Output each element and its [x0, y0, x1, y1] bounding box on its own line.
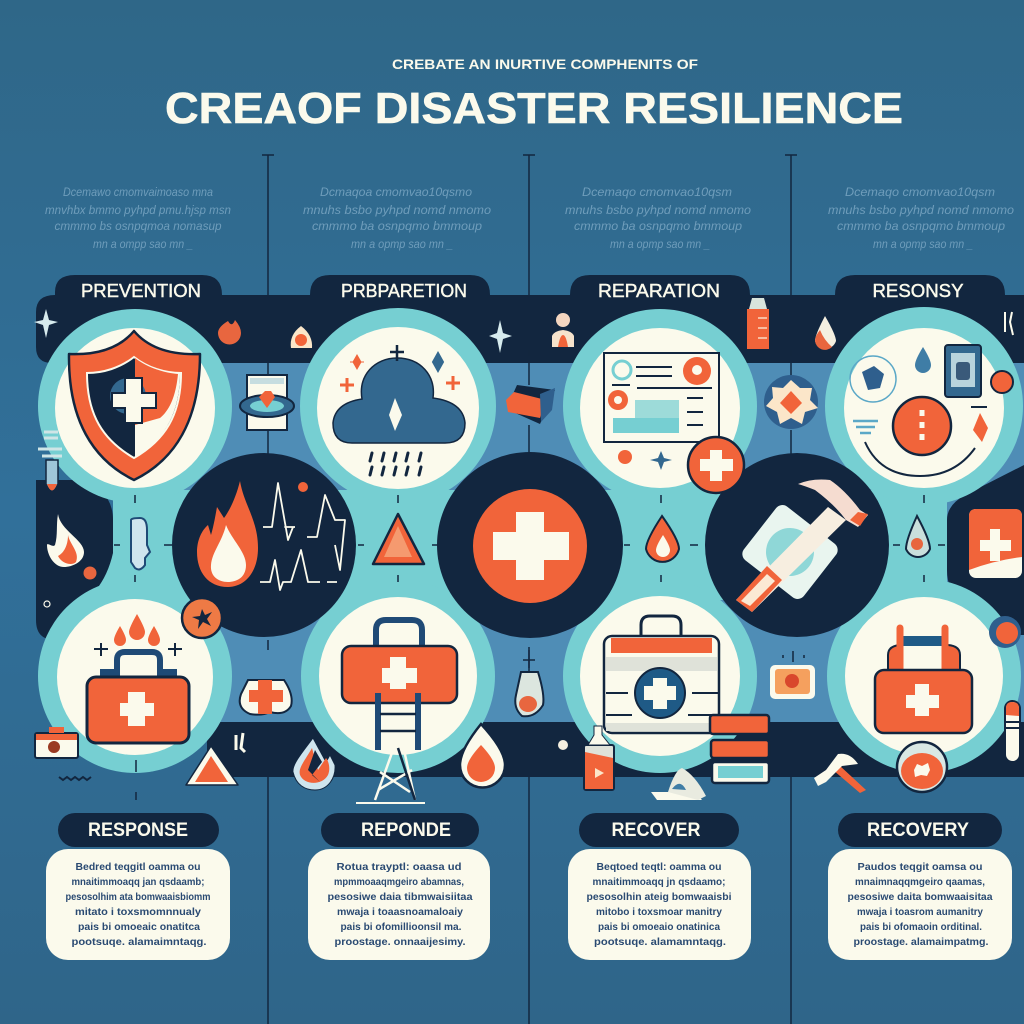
icon: stack of boxes [710, 715, 769, 783]
icon: capsule tube [1005, 701, 1020, 762]
icon: flame and heartbeat [197, 481, 345, 590]
icon: flame drop [460, 724, 505, 788]
body text: pais bi ofomillioonsil ma. [340, 921, 462, 933]
icon: sparkle [34, 309, 58, 338]
text box [828, 849, 1012, 960]
dark lower band [207, 722, 1024, 777]
body text [328, 861, 473, 948]
tab labels: RESONSY [872, 281, 964, 301]
icon: glass drop [906, 516, 930, 557]
body text: pesosolhim ata bomwaaisbiomm [66, 891, 210, 903]
faint intro text: column 4: mnuhs bsbo pyhpd nomd nmomo [828, 203, 1014, 217]
left side small icons [34, 309, 150, 758]
body text: Bedred teqgitl oamma ou [76, 861, 200, 873]
icon: first aid kit with ladder [342, 620, 457, 750]
faint intro text: column 3: Dcemaqo cmomvao10qsm [582, 185, 732, 199]
text box [46, 849, 230, 960]
faint intro text: column 1 [45, 185, 231, 251]
icon: thermometer [131, 518, 150, 569]
panel: response [46, 813, 230, 960]
panel: reponde: REPONDE [361, 820, 451, 841]
body text: Beqtoed teqtl: oamma ou [596, 861, 722, 873]
body text: pesosiwe daia tibmwaisiitaa [328, 891, 473, 903]
icon: medical card [969, 509, 1022, 578]
faint intro text: column 2 [303, 185, 491, 251]
icon: response cycle [850, 345, 1013, 476]
icon: small hammer [814, 754, 866, 793]
faint intro text: column 2: Dcmaqoa cmomvao10qsmo [320, 185, 472, 199]
body text: mitato i toxsmomnnualy [75, 906, 201, 918]
middle connector icons [182, 375, 1022, 648]
faint intro text: column 2: mn a opmp sao mn _ [351, 237, 453, 251]
light blue band [135, 360, 1024, 725]
icon: plus badge [688, 437, 744, 493]
icon: hammer and bandage [736, 480, 868, 612]
icon: spray can [584, 726, 614, 790]
faint intro text: column 3: cmmmo ba osnpqmo bmmoup [574, 219, 742, 233]
upper band small icons [218, 298, 1013, 353]
icon: squiggle marks [1005, 312, 1013, 335]
faint intro text: column 4 [828, 185, 1014, 251]
icon: drop [815, 316, 836, 350]
icon: small patch [770, 651, 815, 699]
pill heading [321, 813, 479, 847]
body text [586, 861, 732, 948]
faint intro text: column 3: mn a opmp sao mn _ [610, 237, 710, 251]
icon: torn book [506, 385, 555, 424]
icon: person [552, 313, 574, 347]
body text: pais bi omoeaio onatinica [598, 921, 720, 933]
body text: Paudos teqgit oamsa ou [858, 861, 982, 873]
teal connector [96, 490, 947, 600]
icon: small cream dish [651, 768, 706, 800]
body text: Rotua trayptl: oaasa ud [336, 861, 462, 873]
text box [308, 849, 490, 960]
icon: first aid pouch [240, 680, 292, 715]
tab labels: REPARATION [598, 281, 720, 301]
teal discs [38, 307, 1023, 773]
body text: proostage. alamaimpatmg. [854, 936, 989, 948]
faint intro text: column 4: mn a opmp sao mn _ [873, 237, 973, 251]
faint intro text: column 4: Dcemaqo cmomvao10qsm [845, 185, 995, 199]
tab labels [81, 281, 964, 301]
icon: shield [69, 331, 200, 480]
lower band small icons [59, 647, 1020, 803]
icon: small ball right [989, 616, 1021, 648]
faint intro text: column 2: mnuhs bsbo pyhpd nomd nmomo [303, 203, 491, 217]
panel: response: RESPONSE [88, 820, 188, 841]
body text [66, 861, 210, 948]
body text: mpmmoaaqmgeiro abamnas, [334, 876, 464, 888]
body text: mwaja i toasrom aumanitry [857, 906, 983, 918]
body text: mitobo i toxsmoar manitry [596, 906, 722, 918]
panel: recovery [828, 813, 1012, 960]
dark discs [172, 452, 889, 638]
column divider lines [262, 155, 797, 1024]
icon: blood drop [646, 516, 679, 562]
body text: proostage. onnaaijesimy. [334, 936, 466, 948]
body text: mwaja i toaasnoamaloaiy [337, 906, 463, 918]
cream discs [55, 327, 1004, 756]
pill heading [838, 813, 1002, 847]
icon: warning triangle [373, 514, 424, 564]
title: CREAOF DISASTER RESILIENCE [165, 84, 903, 133]
body text: pais bi ofomaoin orditinal. [860, 921, 982, 933]
icon: squiggle marks [236, 733, 245, 752]
faint intro text: column 1: mn a ompp sao mn _ [93, 237, 193, 251]
icon: small flame lamp [291, 326, 312, 348]
icon: small blob [558, 740, 568, 750]
icon: sparkle [489, 320, 512, 353]
body text: pais bi omoeaic onatitca [78, 921, 200, 933]
icon: small orange dot [84, 566, 96, 580]
icon: card with ring [240, 375, 294, 430]
dark left block [36, 480, 113, 640]
tab labels: PRBPARETION [341, 281, 467, 301]
icon: supply case [604, 616, 719, 733]
pill heading [579, 813, 739, 847]
faint intro text: column 4: cmmmo ba osnpqmo bmmoup [837, 219, 1005, 233]
body text: pootsuqe. alamaimntaqg. [72, 936, 207, 948]
body text: mnaitimmoaqq jan qsdaamb; [72, 876, 204, 888]
icon: small ring [44, 601, 50, 607]
icon: ladder tower [356, 748, 425, 803]
body text: pootsuqe. alamamntaqg. [594, 936, 726, 948]
icon: lantern [515, 647, 543, 716]
dark right block [947, 465, 1024, 635]
icon: flame [47, 514, 84, 567]
text box [568, 849, 751, 960]
icon: medical cross circle [473, 489, 587, 603]
body text [848, 861, 993, 948]
panel: recovery: RECOVERY [867, 820, 969, 841]
icon: wave squiggle left [59, 777, 91, 780]
icon: first aid kit one [87, 614, 189, 743]
icon: document panel [604, 353, 719, 470]
icon: orange first aid bag [875, 628, 972, 733]
faint intro text: column 1: mnvhbx bmmo pyhpd pmu.hjsp msn [45, 203, 231, 217]
panel: recover: RECOVER [612, 820, 701, 841]
body text: mnaitimmoaqq jn qsdaamo; [592, 876, 726, 888]
subtitle: CREBATE AN INURTIVE COMPHENITS OF [392, 56, 698, 72]
body text: mnaimnaqqmgeiro qaamas, [855, 876, 985, 888]
faint intro text: column 3: mnuhs bsbo pyhpd nomd nmomo [565, 203, 751, 217]
faint intro text: column 1: cmmmo bs osnpqmoa nomasup [54, 219, 222, 233]
body text: pesosolhin ateig bomwaaisbi [586, 891, 732, 903]
icon: burst [764, 375, 818, 429]
central diagram band [36, 275, 1024, 800]
panel: recover [568, 813, 751, 960]
icon: burning flame [293, 738, 335, 790]
faint intro text: column 1: Dcemawo cmomvaimoaso mna [63, 185, 213, 199]
icon: orange marker ball [182, 598, 222, 638]
icon: wave squiggle right [973, 773, 1004, 776]
icon: warning triangle [186, 746, 238, 785]
pill heading [58, 813, 219, 847]
icon: storm cloud [333, 345, 465, 475]
panel: reponde [308, 813, 490, 960]
icon: orange ball [218, 320, 241, 344]
icon: small medical case [35, 727, 78, 758]
tab labels: PREVENTION [81, 281, 201, 301]
dark upper band with tabs [36, 275, 1024, 363]
faint intro text: column 3 [565, 185, 751, 251]
faint intro text: column 2: cmmmo ba osnpqmo bmmoup [312, 219, 482, 233]
icon: test tube [38, 432, 62, 491]
body text: pesosiwe daita bomwaaisitaa [848, 891, 993, 903]
icon: orange badge [897, 742, 947, 792]
icon: bottle [747, 298, 769, 349]
